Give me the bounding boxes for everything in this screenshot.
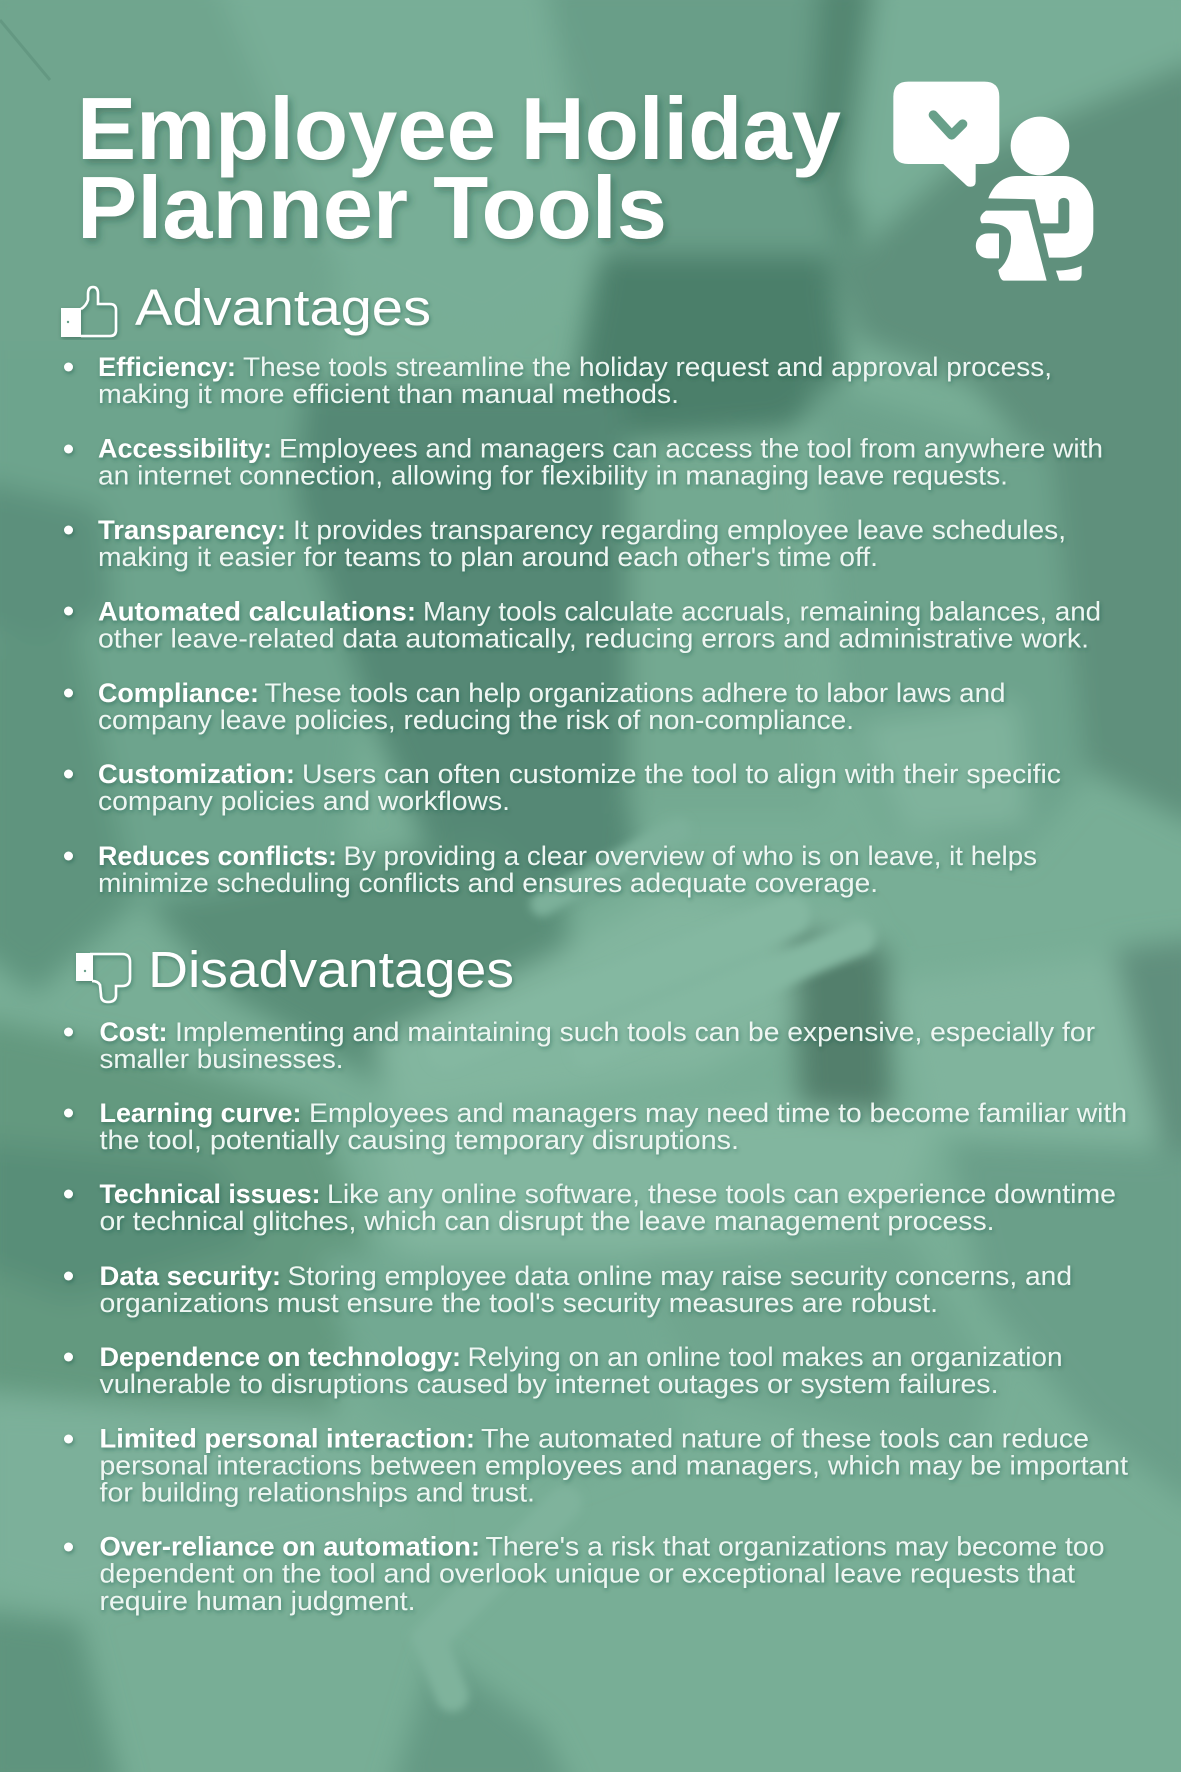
- item: reduces conflicts: By providing a clear overview of who is on leave, it helps: [344, 841, 1037, 871]
- heading: disadvantages: Disadvantages: [148, 941, 514, 998]
- item: automated calculations: other leave-related data automatically, reducing errors and administrative work.: [98, 624, 1089, 654]
- item: dependence on technology: vulnerable to disruptions caused by internet outages or system failures.: [100, 1369, 998, 1399]
- item: over-reliance on automation: dependent on the tool and overlook unique or exceptional leave requests that: [100, 1558, 1076, 1588]
- item: learning curve: Learning curve:: [100, 1098, 302, 1128]
- title: [77, 79, 841, 257]
- item: accessibility: an internet connection, allowing for flexibility in managing leave requests.: [98, 460, 1008, 490]
- item: cost: Implementing and maintaining such tools can be expensive, especially for: [175, 1017, 1095, 1047]
- item: reduces conflicts: Reduces conflicts:: [98, 841, 337, 871]
- item: learning curve: [64, 1098, 1127, 1155]
- item: customization: company policies and workflows.: [98, 786, 510, 816]
- item: reduces conflicts: [64, 841, 1037, 898]
- item: automated calculations: Many tools calculate accruals, remaining balances, and: [423, 596, 1101, 626]
- item: efficiency: [64, 352, 1052, 409]
- item: customization: Users can often customize the tool to align with their specific: [302, 759, 1061, 789]
- icon: thumbs up: [61, 287, 116, 337]
- icon: thumbs down: [76, 953, 130, 1002]
- item: limited personal interaction: [64, 1424, 1129, 1508]
- item: over-reliance on automation: There's a risk that organizations may become too: [486, 1532, 1104, 1562]
- item: transparency: It provides transparency regarding employee leave schedules,: [293, 515, 1066, 545]
- item: cost: smaller businesses.: [100, 1044, 344, 1074]
- item: learning curve: the tool, potentially causing temporary disruptions.: [100, 1125, 739, 1155]
- item: accessibility: Employees and managers can access the tool from anywhere with: [279, 434, 1103, 464]
- item: accessibility: [64, 434, 1103, 490]
- item: efficiency: These tools streamline the holiday request and approval process,: [243, 352, 1052, 382]
- item: compliance: company leave policies, reducing the risk of non-compliance.: [98, 705, 854, 735]
- list: disadvantages: [64, 1017, 1129, 1616]
- item: dependence on technology: [64, 1342, 1062, 1399]
- item: customization: Customization:: [98, 759, 295, 789]
- heading: advantages: Advantages: [135, 279, 431, 336]
- item: data security: Data security:: [100, 1261, 281, 1291]
- title: Employee Holiday: [77, 79, 841, 178]
- item: efficiency: making it more efficient than manual methods.: [98, 379, 679, 409]
- item: over-reliance on automation: Over-reliance on automation:: [100, 1532, 480, 1562]
- icon: person with speech bubble: [893, 82, 1093, 281]
- item: efficiency: Efficiency:: [98, 352, 236, 382]
- item: limited personal interaction: personal interactions between employees and managers, which may be important: [100, 1450, 1129, 1480]
- item: limited personal interaction: for building relationships and trust.: [100, 1478, 535, 1508]
- item: compliance: [64, 678, 1006, 735]
- item: reduces conflicts: minimize scheduling conflicts and ensures adequate coverage.: [98, 868, 878, 898]
- item: cost: Cost:: [100, 1017, 168, 1047]
- title: Planner Tools: [77, 158, 667, 257]
- item: dependence on technology: Dependence on technology:: [100, 1342, 461, 1372]
- item: technical issues: Like any online software, these tools can experience downtime: [327, 1179, 1116, 1209]
- item: data security: [64, 1261, 1072, 1318]
- item: over-reliance on automation: [64, 1532, 1104, 1616]
- item: accessibility: Accessibility:: [98, 434, 272, 464]
- item: learning curve: Employees and managers may need time to become familiar with: [309, 1098, 1127, 1128]
- item: customization: [64, 759, 1061, 816]
- item: transparency: Transparency:: [98, 515, 286, 545]
- item: technical issues: Technical issues:: [100, 1179, 320, 1209]
- item: transparency: making it easier for teams to plan around each other's time off.: [98, 542, 878, 572]
- item: data security: organizations must ensure the tool's security measures are robust.: [100, 1288, 938, 1318]
- item: compliance: Compliance:: [98, 678, 259, 708]
- item: data security: Storing employee data online may raise security concerns, and: [288, 1261, 1072, 1291]
- item: limited personal interaction: The automated nature of these tools can reduce: [481, 1424, 1089, 1454]
- item: automated calculations: [64, 596, 1101, 654]
- list: advantages: [64, 352, 1103, 898]
- item: over-reliance on automation: require human judgment.: [100, 1586, 416, 1616]
- item: limited personal interaction: Limited personal interaction:: [100, 1424, 475, 1454]
- item: transparency: [64, 515, 1066, 572]
- item: cost: [64, 1017, 1095, 1074]
- item: automated calculations: Automated calculations:: [98, 596, 416, 626]
- item: compliance: These tools can help organizations adhere to labor laws and: [264, 678, 1006, 708]
- item: technical issues: or technical glitches, which can disrupt the leave management process.: [100, 1206, 995, 1236]
- item: dependence on technology: Relying on an online tool makes an organization: [468, 1342, 1062, 1372]
- item: technical issues: [64, 1179, 1116, 1236]
